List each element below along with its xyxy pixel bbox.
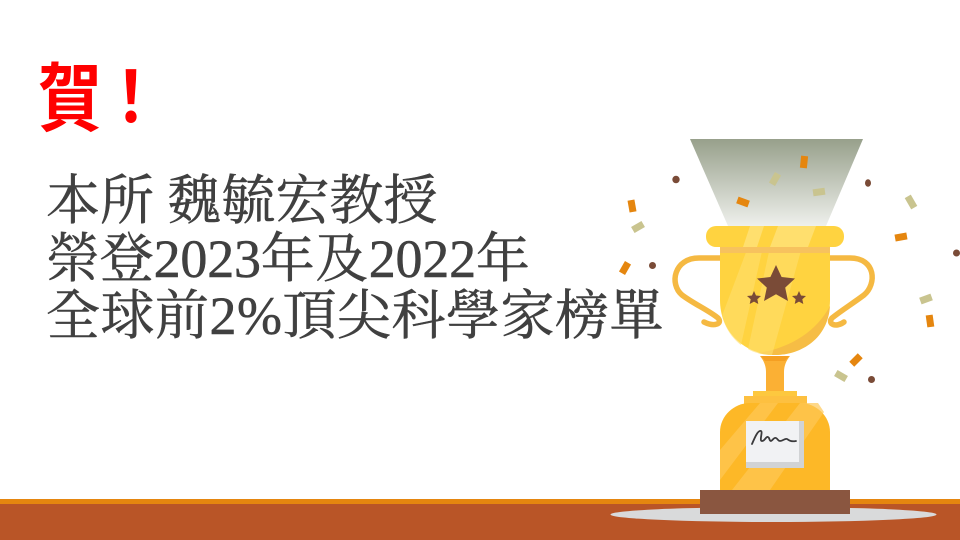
line 1: 本所 魏毓宏教授: [46, 171, 438, 231]
stem collar: [761, 356, 789, 361]
cup band: [720, 247, 830, 253]
confetti: brown dots: [649, 176, 960, 383]
base step top: [753, 391, 797, 397]
signature: [752, 431, 796, 444]
base body: [720, 403, 830, 490]
title: congratulations: ！: [99, 58, 163, 138]
confetti: orange: [619, 156, 934, 367]
base plinth: [700, 490, 850, 514]
base step: [744, 396, 807, 404]
stem: [760, 356, 790, 392]
rim: [706, 226, 844, 247]
line 3: 全球前2%頂尖科學家榜單: [46, 286, 664, 346]
title: congratulations: [38, 58, 163, 141]
light beam: [690, 139, 863, 226]
small star right: [792, 291, 806, 304]
text block: announcement: [46, 171, 664, 346]
cup: [720, 247, 830, 355]
base highlight: [720, 403, 824, 490]
small star left: [747, 291, 761, 304]
plaque: [746, 421, 804, 468]
handles: [675, 258, 872, 325]
footer band: [0, 499, 960, 540]
rim highlight: [743, 226, 816, 247]
large star: [757, 265, 795, 301]
trophy: [675, 226, 872, 514]
cup highlight: [722, 247, 802, 355]
cup shading: [758, 306, 830, 355]
floor shadow: [610, 507, 936, 522]
confetti: khaki: [631, 172, 933, 382]
title: congratulations: 賀: [38, 58, 102, 141]
line 2: 榮登2023年 及2022年: [46, 229, 530, 289]
